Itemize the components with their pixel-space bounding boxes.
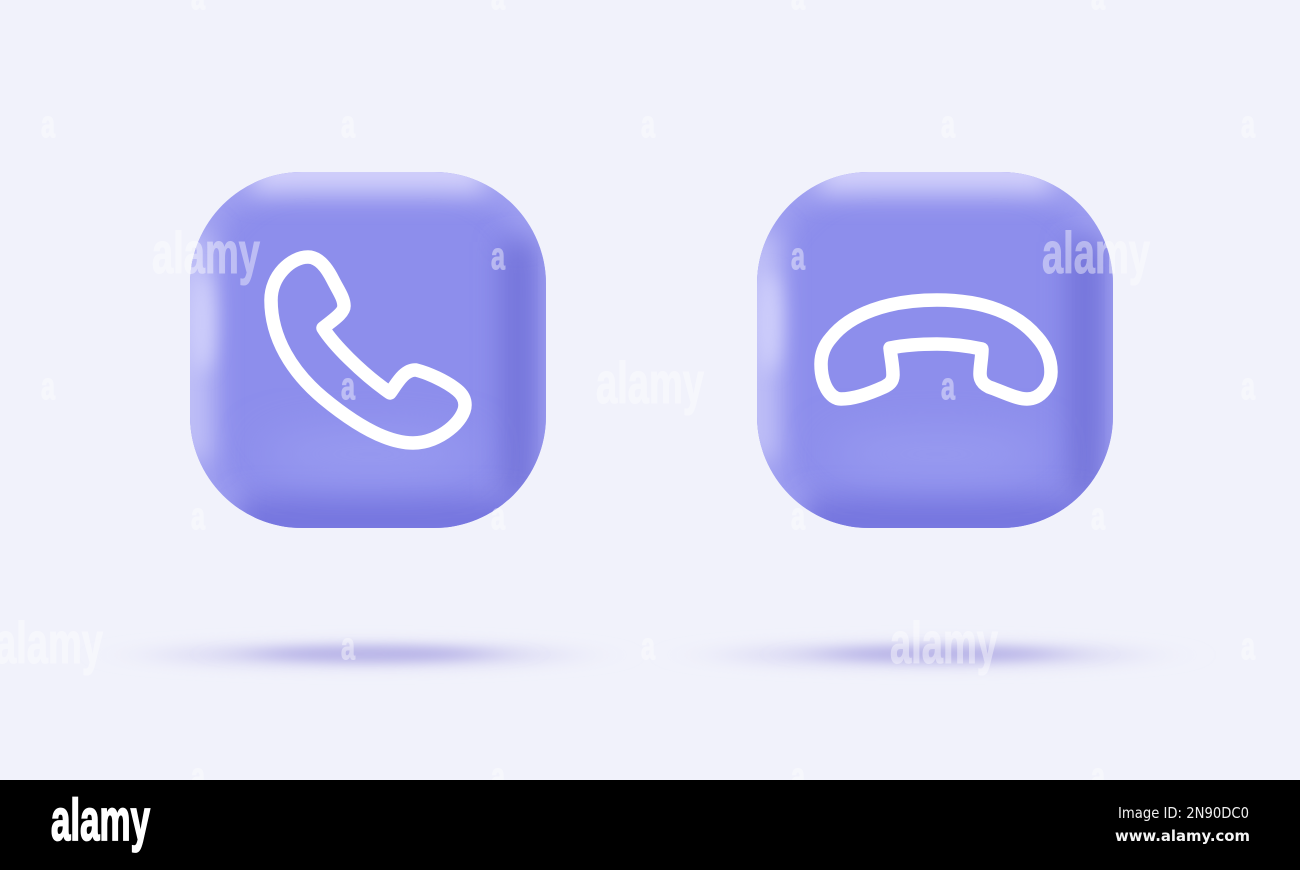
watermarks: a [941, 104, 956, 146]
shadow: right button [722, 642, 1142, 668]
watermarks: a [1241, 366, 1256, 408]
watermarks: alamy [152, 221, 260, 286]
watermarks: alamy [890, 611, 998, 676]
watermarks: a [41, 366, 56, 408]
watermarks: a [941, 366, 956, 408]
watermarks: a [1241, 626, 1256, 668]
image id: Image ID: 2N90DC0 [1118, 804, 1249, 822]
button: call [190, 172, 546, 528]
watermarks: a [791, 236, 806, 278]
footer bar [0, 780, 1300, 870]
logo: alamy: alamy [51, 788, 150, 853]
watermarks: a [1091, 756, 1106, 798]
shadow: left button [152, 642, 572, 668]
watermarks: a [641, 104, 656, 146]
watermarks: a [341, 626, 356, 668]
watermarks: a [641, 626, 656, 668]
icon: hung up phone handset [821, 300, 1051, 399]
watermarks: a [41, 104, 56, 146]
website: www.alamy.com [1115, 827, 1250, 845]
watermarks: a [341, 104, 356, 146]
watermarks: a [491, 756, 506, 798]
watermarks: a [191, 496, 206, 538]
watermarks: a [1091, 496, 1106, 538]
button: hang up [757, 172, 1113, 528]
icon: phone handset [271, 257, 465, 443]
watermarks: alamy [596, 351, 704, 416]
watermarks: alamy [1042, 221, 1150, 286]
watermarks: a [341, 366, 356, 408]
watermarks: a [491, 496, 506, 538]
watermarks: a [191, 756, 206, 798]
watermarks: a [791, 756, 806, 798]
watermarks: a [791, 496, 806, 538]
watermarks: a [491, 236, 506, 278]
watermarks: a [1241, 104, 1256, 146]
